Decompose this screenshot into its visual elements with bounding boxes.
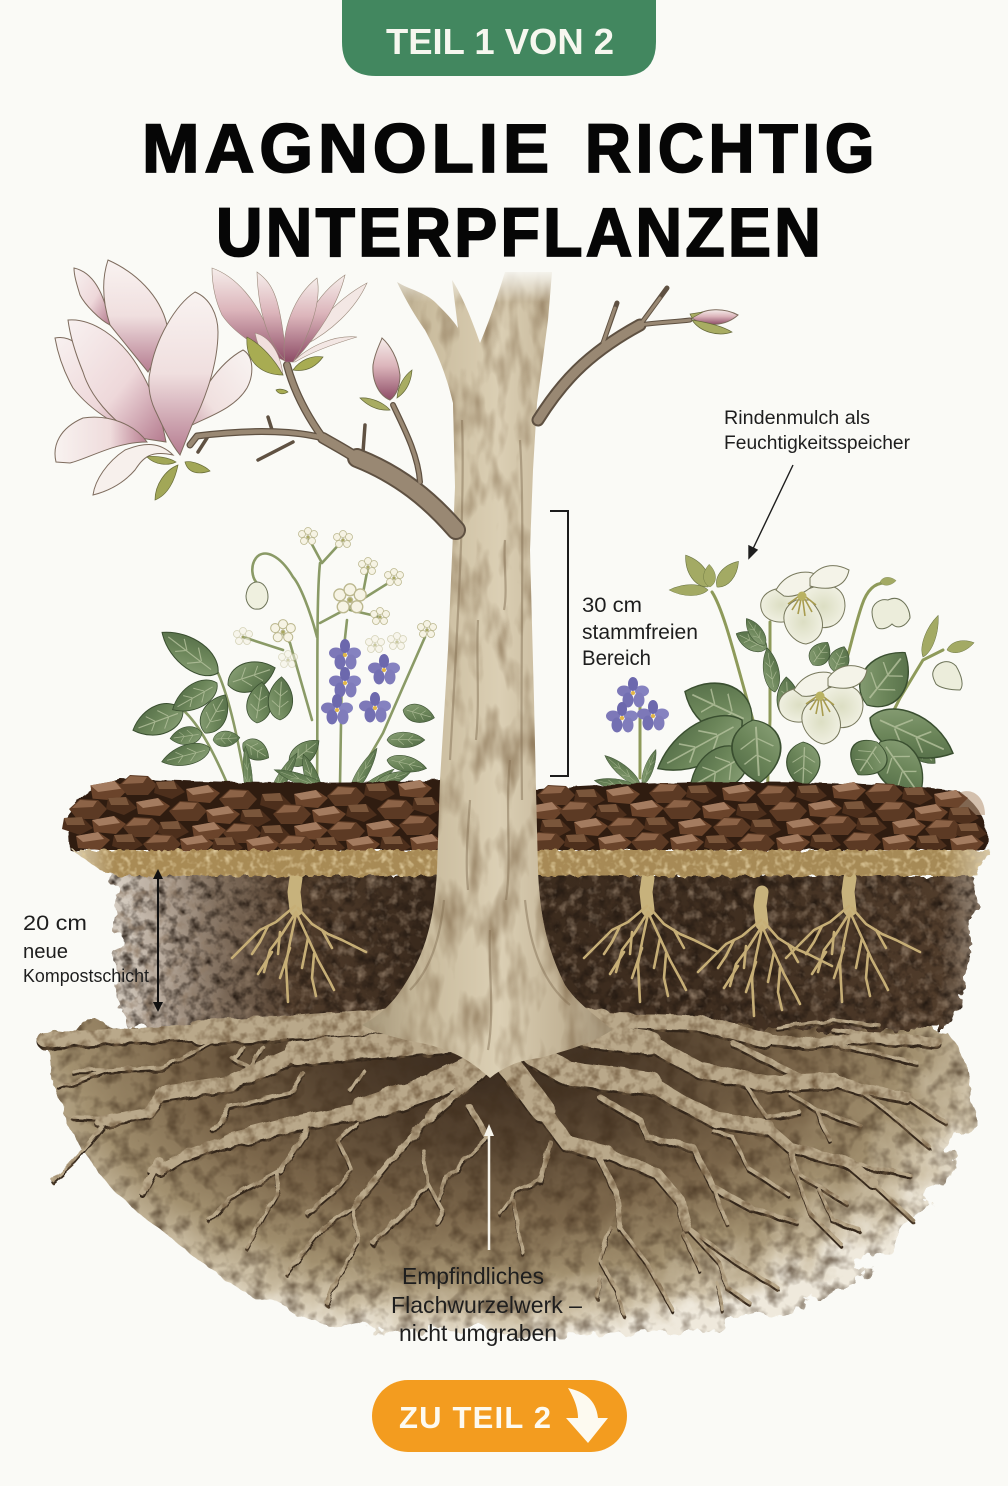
arrow: to mulch	[749, 465, 793, 558]
annotation: shallow roots: Empfindliches	[402, 1263, 544, 1289]
large blossom	[55, 260, 252, 495]
root system	[45, 1017, 947, 1316]
title	[142, 110, 879, 271]
violets	[321, 639, 400, 724]
annotation: shallow roots: Flachwurzelwerk –	[391, 1292, 582, 1318]
title: UNTERPFLANZEN	[216, 194, 824, 271]
small violets	[606, 677, 669, 732]
annotation: Rindenmulch: Feuchtigkeitsspeicher	[724, 432, 910, 454]
leaves	[128, 621, 437, 807]
annotation: 20 cm compost: Kompostschicht	[23, 966, 149, 986]
annotation: 20 cm compost: neue	[23, 941, 68, 963]
button: Zu Teil 2: ZU TEIL 2	[399, 1400, 551, 1435]
branch bark	[190, 298, 690, 530]
badge: Teil 1 von 2: TEIL 1 VON 2	[386, 21, 614, 62]
title: RICHTIG	[585, 110, 879, 187]
trunk top fade	[390, 268, 570, 302]
annotation: Rindenmulch: Rindenmulch als	[724, 407, 870, 429]
leaves	[593, 615, 961, 807]
second blossom	[212, 268, 367, 375]
trunk	[362, 272, 612, 1078]
annotation: 30 cm trunk-free area: Bereich	[582, 647, 651, 670]
left plant group	[128, 528, 437, 807]
right chips	[527, 782, 987, 853]
annotation: Rindenmulch	[724, 407, 910, 558]
bud sepals	[360, 370, 412, 410]
young yellow-green leaves	[669, 551, 976, 659]
branch tip bud	[692, 310, 738, 324]
lower soil with root zone	[50, 1013, 973, 1336]
bud	[373, 338, 400, 400]
hellebore blossoms	[761, 566, 867, 744]
annotation: 30 cm trunk-free area	[550, 511, 698, 776]
small plant roots	[232, 878, 920, 1016]
title: MAGNOLIE	[142, 110, 554, 187]
branch outline	[190, 288, 690, 530]
annotation: shallow roots	[391, 1124, 582, 1346]
badge: Teil 1 von 2	[342, 0, 656, 76]
magnolia branches	[190, 288, 690, 530]
left chips	[62, 775, 444, 855]
stems	[640, 583, 943, 802]
annotation: 30 cm trunk-free area: stammfreien	[582, 621, 698, 644]
bracket	[550, 511, 568, 776]
white arrow	[488, 1135, 490, 1250]
nodding buds	[872, 598, 962, 690]
second blossom sepals	[247, 337, 323, 394]
magnolia blossoms	[55, 260, 738, 500]
stems	[183, 537, 425, 790]
button: Zu Teil 2	[372, 1380, 627, 1452]
branch tip sepals	[690, 312, 732, 334]
mulch layer	[62, 775, 987, 855]
white flower clusters	[234, 528, 436, 668]
drooping bud	[246, 582, 268, 609]
annotation: shallow roots: nicht umgraben	[399, 1320, 557, 1346]
compost surface strip	[72, 850, 990, 876]
right plant group	[593, 551, 976, 807]
annotation: 20 cm compost: 20 cm	[23, 911, 87, 935]
compost soil layer	[112, 872, 975, 1030]
icon: down arrow	[566, 1388, 608, 1443]
annotation: 30 cm trunk-free area: 30 cm	[582, 594, 642, 617]
annotation: 20 cm compost	[23, 869, 163, 1012]
double arrow	[157, 878, 159, 1002]
mulch base	[68, 778, 440, 850]
large blossom sepals	[147, 456, 210, 500]
